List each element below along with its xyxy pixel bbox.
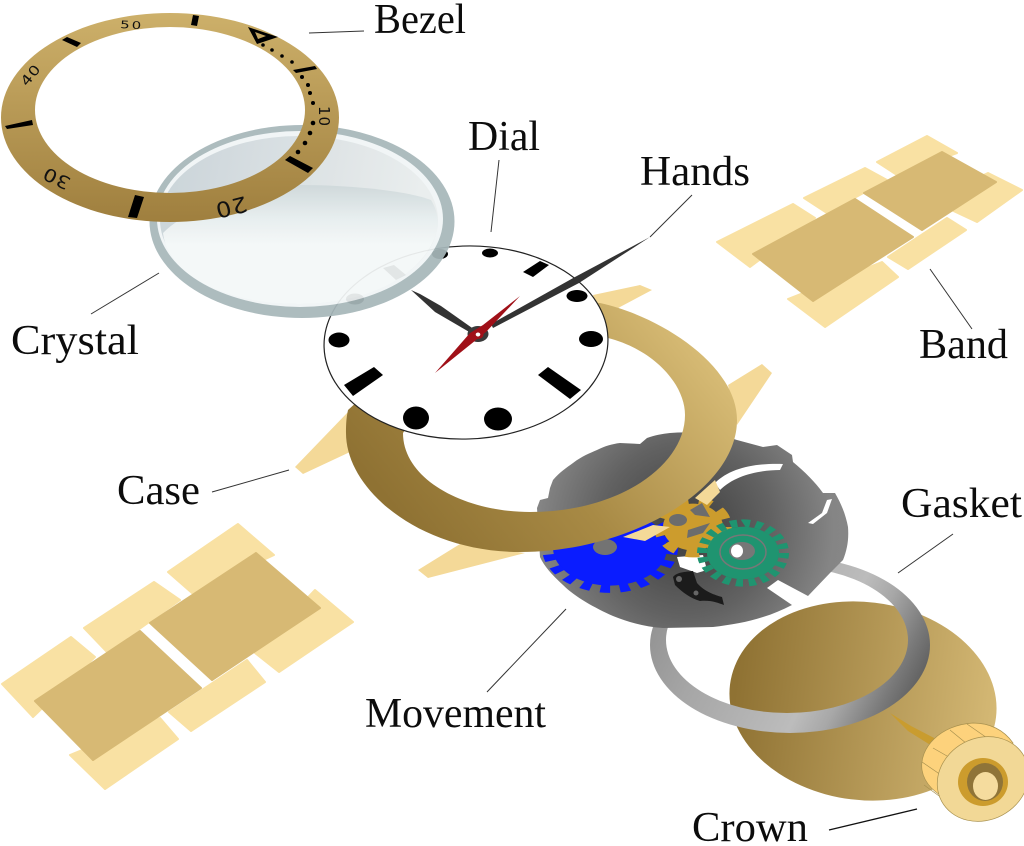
gasket — [650, 557, 930, 733]
band: lower left — [2, 524, 353, 789]
bezel numbers: 20 — [212, 190, 250, 222]
bezel numbers: 10 — [315, 106, 333, 127]
label: Movement: Movement — [365, 691, 546, 737]
second hand — [435, 296, 520, 373]
crown — [890, 713, 1024, 837]
crystal glass — [160, 136, 438, 304]
gold gear holes — [687, 503, 710, 538]
dial face — [321, 241, 611, 444]
movement — [537, 432, 848, 628]
case ring — [346, 300, 737, 552]
dial markers — [328, 248, 603, 430]
bezel — [1, 13, 339, 222]
label: Crystal: Crystal — [11, 318, 139, 364]
green gear — [702, 523, 784, 583]
hands — [411, 237, 650, 373]
dial — [321, 241, 611, 444]
bezel ring — [1, 13, 339, 222]
crystal inner edge — [157, 131, 443, 307]
bezel numbers: 50 — [120, 19, 144, 32]
label: Gasket: Gasket — [901, 481, 1022, 527]
hub — [468, 326, 488, 342]
lugs — [295, 285, 772, 578]
bezel triangle — [248, 27, 278, 44]
blue gear — [548, 507, 672, 589]
gold gear — [659, 500, 727, 554]
lever — [673, 571, 724, 605]
crown face — [922, 721, 1024, 837]
band: upper right — [717, 136, 1022, 327]
label: Hands: Hands — [640, 149, 750, 195]
minute hand — [491, 237, 650, 328]
crown stem — [890, 713, 936, 746]
crystal rim — [150, 125, 454, 318]
movement plate — [537, 432, 848, 628]
bezel numbers — [17, 19, 333, 222]
case back — [718, 586, 1008, 816]
bezel numbers: 30 — [39, 162, 74, 194]
hour hand — [411, 290, 475, 333]
crown knurled body — [922, 723, 1013, 815]
green gear hub — [720, 535, 766, 569]
hub centre — [472, 330, 484, 339]
blue gear hub — [593, 539, 617, 555]
bezel numbers: 40 — [17, 61, 45, 89]
label: Band: Band — [919, 322, 1008, 368]
bezel bars — [5, 15, 317, 218]
label: Case: Case — [117, 468, 200, 514]
crystal reflection — [163, 185, 438, 304]
movement slots — [677, 464, 832, 573]
label: Dial: Dial — [468, 114, 540, 160]
bezel dots — [261, 43, 315, 154]
crystal — [150, 125, 454, 318]
